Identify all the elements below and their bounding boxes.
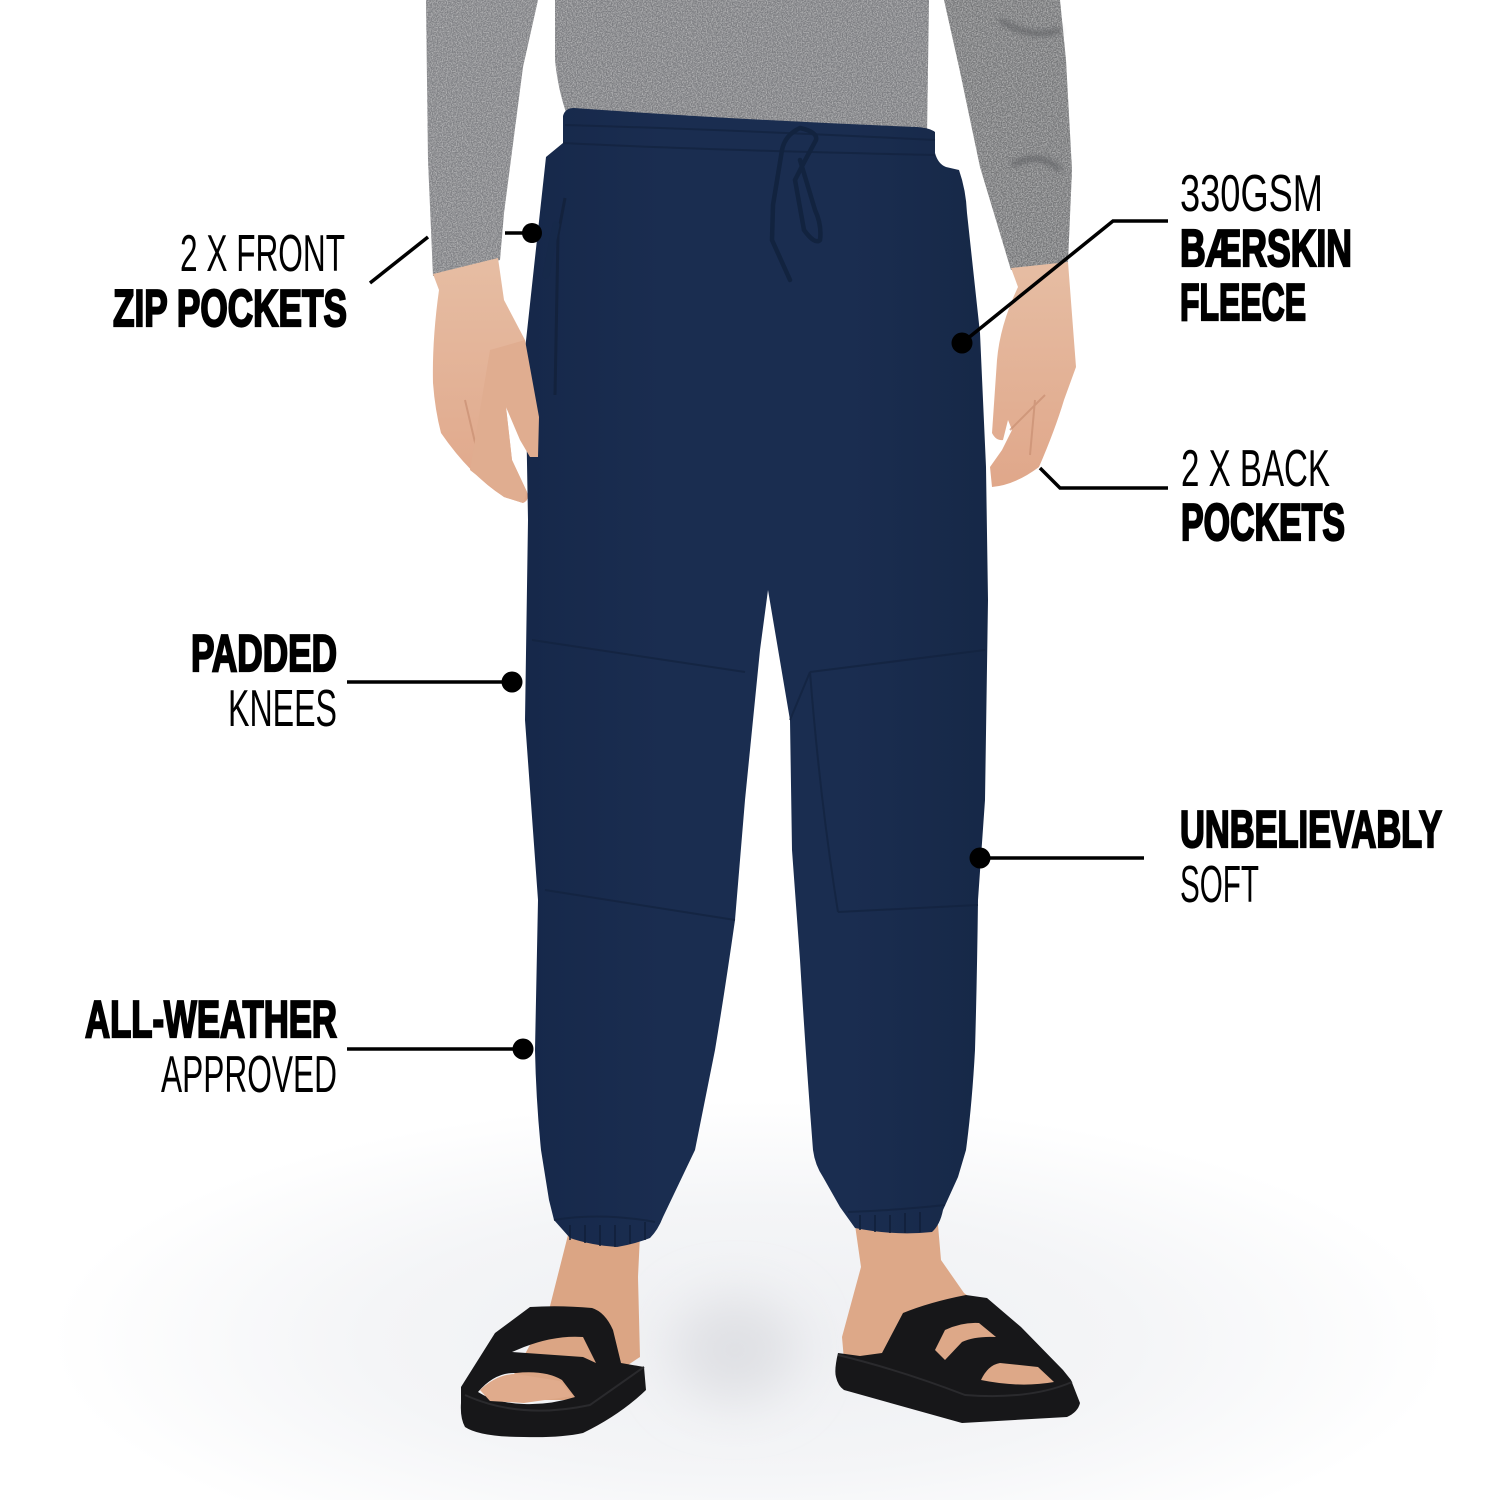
floor shadow <box>50 1100 1450 1500</box>
left hand thumb over pants <box>470 340 539 503</box>
callout: padded knees <box>191 625 522 738</box>
right sleeve folds <box>1000 20 1060 170</box>
front zip pocket <box>555 198 565 395</box>
shirt torso <box>555 0 929 135</box>
finger lines <box>465 395 1045 480</box>
callout: all-weather approved: APPROVED <box>161 1046 337 1104</box>
left sandal <box>461 1306 646 1437</box>
callout: padded knees: KNEES <box>228 680 337 738</box>
callout: 2 x back pockets <box>1040 440 1345 552</box>
zip pull <box>546 225 556 275</box>
label: 2 X BACK <box>1181 440 1330 498</box>
callout: unbelievably soft <box>970 801 1442 914</box>
callout: 2 x back pockets: POCKETS <box>1181 494 1345 552</box>
left foot <box>500 1235 640 1400</box>
label: 330GSM <box>1180 165 1323 223</box>
figure: model wearing fleece pants <box>426 0 1080 1437</box>
pants <box>525 108 988 1247</box>
callout: 330gsm fleece: BÆRSKIN <box>1180 220 1352 278</box>
drawstring <box>772 128 820 280</box>
callout: unbelievably soft: SOFT <box>1180 856 1259 914</box>
sandal sole highlights <box>465 1355 1072 1411</box>
left sandal toes <box>480 1374 573 1403</box>
label: 2 X FRONT <box>180 225 345 283</box>
label: PADDED <box>191 625 337 683</box>
callout: 2 x front zip pockets: ZIP POCKETS <box>113 280 347 338</box>
left sleeve <box>426 0 538 276</box>
right sandal <box>835 1295 1080 1423</box>
right hand <box>990 262 1076 487</box>
cuff ribbing <box>570 1212 920 1247</box>
callout: 330gsm fleece <box>952 165 1352 354</box>
label: ALL-WEATHER <box>85 991 337 1049</box>
callout: all-weather approved <box>85 991 534 1104</box>
left hand <box>433 258 539 503</box>
right sleeve <box>944 0 1072 270</box>
callout: 2 x front zip pockets <box>113 223 542 338</box>
pants seams and waistband <box>532 125 985 1222</box>
right foot <box>842 1225 1058 1392</box>
callout: 330gsm fleece: FLEECE <box>1180 274 1306 332</box>
